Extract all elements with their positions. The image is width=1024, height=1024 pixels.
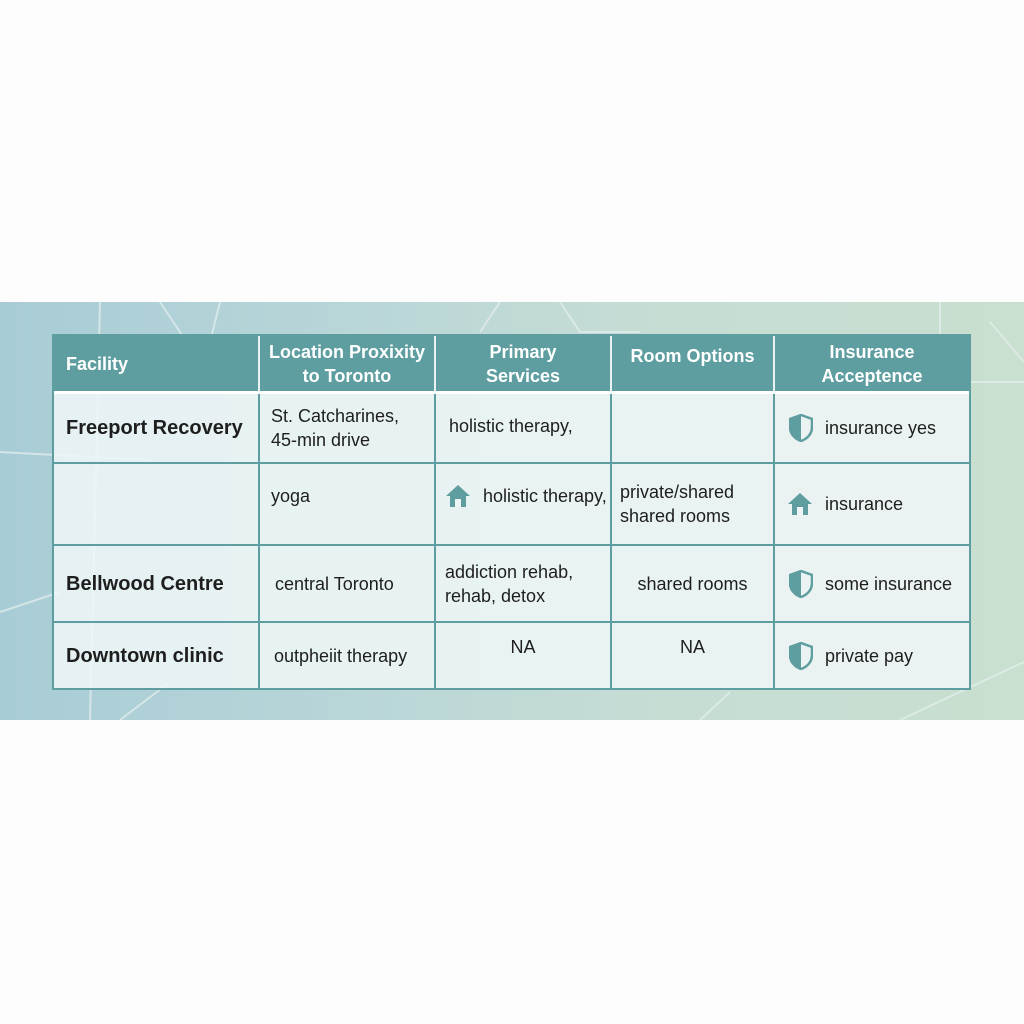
header: Facility: Facility: [66, 354, 128, 374]
row 4: Downtown clinic: [66, 644, 224, 666]
table: insurance: [825, 494, 903, 514]
header: Facility: [54, 336, 260, 394]
row 2: [54, 464, 260, 546]
table: shared rooms: [620, 506, 730, 526]
row1 insurance with shield icon: insurance yes: [825, 418, 936, 438]
table: addiction rehab,: [445, 562, 573, 582]
table: private/shared: [620, 482, 734, 502]
header: Insurance: Acceptence: [821, 366, 923, 386]
table: holistic therapy,: [449, 416, 573, 436]
row 4: [54, 623, 260, 688]
header: Room Options: Room Options: [630, 346, 754, 366]
table: central Toronto: [275, 574, 394, 594]
map background band: [0, 302, 1024, 720]
row 3: Bellwood Centre: [66, 572, 224, 594]
header: Location: Location Proxixity: [269, 342, 425, 362]
row 3: [54, 546, 260, 623]
header: Primary Services: Primary: [489, 342, 557, 362]
row 1: Freeport Recovery: [66, 417, 243, 439]
table: some insurance: [825, 574, 952, 594]
table: outpheiit therapy: [274, 646, 407, 666]
header: Location: [260, 336, 436, 394]
row 1: [54, 394, 260, 464]
table: [52, 334, 971, 690]
header: Room Options: [612, 336, 775, 394]
header: Location: to Toronto: [303, 366, 391, 386]
table: shared rooms: [637, 574, 748, 594]
table: 45-min drive: [271, 430, 370, 450]
table: NA: [680, 637, 705, 657]
table: yoga: [271, 486, 310, 506]
table: NA: [510, 637, 536, 657]
table: private pay: [825, 646, 913, 666]
table: holistic therapy,: [483, 486, 607, 506]
table: rehab, detox: [445, 586, 545, 606]
header: Primary Services: [436, 336, 612, 394]
header: Primary Services: Services: [486, 366, 560, 386]
table: St. Catcharines,: [271, 406, 399, 426]
header: Insurance: Insurance: [829, 342, 915, 362]
row1 insurance with shield icon: [775, 394, 969, 464]
header: Insurance: [775, 336, 969, 394]
